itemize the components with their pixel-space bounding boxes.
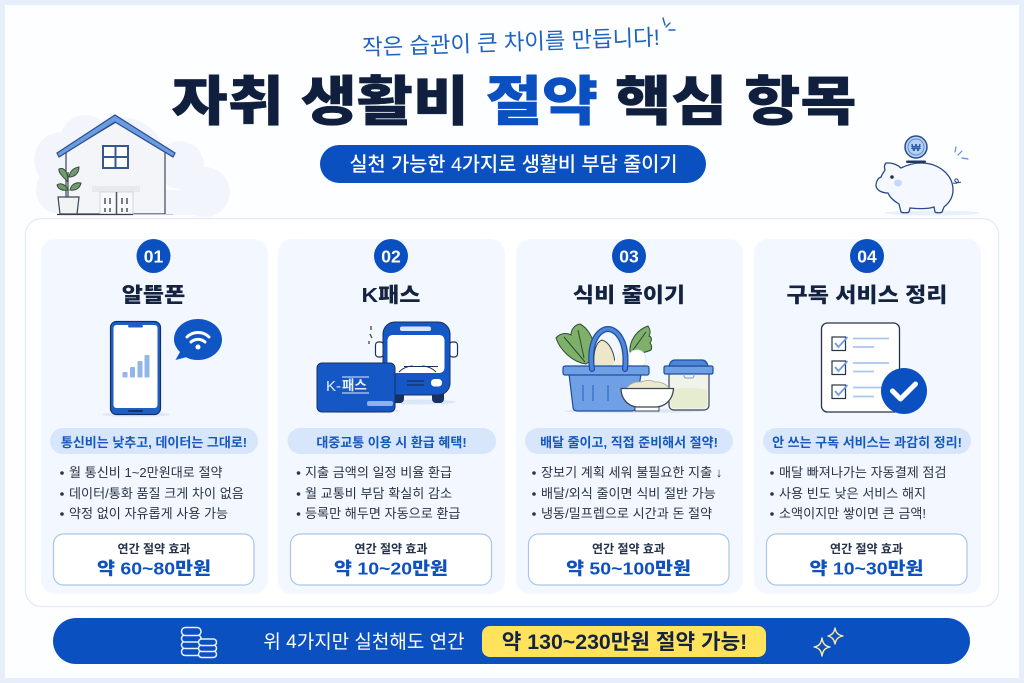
tagline [525,428,733,454]
bullet list: 냉동/밀프렙으로 시간과 돈 절약 [541,506,712,521]
bullet list: 등록만 해두면 자동으로 환급 [305,506,460,521]
icon: phone with wifi bubble [102,319,222,417]
badge 01: 01 [144,246,163,266]
annual savings box [54,534,254,585]
annual savings box: 약 60~80만원 [97,558,211,578]
badge 01 [136,239,170,273]
annual savings box: 약 10~20만원 [334,558,448,578]
annual savings box [766,534,967,585]
badge 02: 02 [381,246,401,266]
annual savings box: 연간 절약 효과 [118,541,190,556]
panel: main container [26,218,998,606]
heading: K패스: K패스 [362,283,420,307]
bullet list [60,465,244,521]
banner text: 위 4가지만 실천해도 연간 [263,631,465,653]
icon: piggy bank: ₩ [911,143,921,154]
bullet list [770,465,947,521]
icon: bus and K-pass card: K- [326,378,341,395]
tagline [50,428,258,454]
summary banner [53,618,970,664]
heading: 구독 서비스 정리: 구독 서비스 정리 [787,283,947,307]
bullet list [297,465,460,521]
tagline: 안 쓰는 구독 서비스는 과감히 정리! [772,435,962,450]
panel: card 02 [278,239,505,594]
icon: sparkles [814,628,843,656]
bullet list: 매달 빠져나가는 자동결제 점검 [779,465,947,480]
annual savings box: 연간 절약 효과 [355,541,427,556]
yellow highlight [482,626,766,657]
tagline: 배달 줄이고, 직접 준비해서 절약! [540,435,718,450]
bullet list: 장보기 계획 세워 불필요한 지출 ↓ [541,465,722,480]
tagline: 대중교통 이용 시 환급 혜택! [316,435,467,450]
bullet list: 데이터/통화 품질 크게 차이 없음 [69,486,244,501]
bullet list: 약정 없이 자유롭게 사용 가능 [69,506,228,521]
title: 자취 생활비 절약 핵심 항목 [172,72,856,132]
panel: card 04 [754,239,981,594]
bullet list: 월 통신비 1~2만원대로 절약 [69,465,223,480]
badge 04 [850,239,884,273]
annual savings box: 약 50~100만원 [566,558,691,578]
badge 03: 03 [619,246,639,266]
bullet list: 소액이지만 쌓이면 큰 금액! [779,506,926,521]
icon: house [34,115,230,217]
badge 04: 04 [857,246,877,266]
icon: bus and K-pass card [316,322,458,413]
badge 03 [612,239,646,273]
subtitle pill [320,145,706,183]
bullet list [532,465,722,521]
subtitle: 작은 습관이 큰 차이를 만듭니다! [362,25,660,60]
icon: checklist [822,323,927,414]
annual savings box: 연간 절약 효과 [830,541,903,556]
annual savings box [290,534,492,585]
heading: 식비 줄이기: 식비 줄이기 [573,283,685,307]
panel: card 01 [41,239,268,594]
bullet list: 지출 금액의 일정 비율 환급 [305,465,452,480]
icon: coins [182,628,216,658]
tagline: 통신비는 낮추고, 데이터는 그대로! [61,435,247,450]
panel: card 03 [516,239,743,594]
icon: bus and K-pass card: 패스 [342,378,367,393]
badge 02 [374,239,408,273]
bullet list: 사용 빈도 낮은 서비스 해지 [779,486,926,501]
subtitle pill: 실천 가능한 4가지로 생활비 부담 줄이기 [349,154,678,176]
tagline [288,428,496,454]
heading: 알뜰폰: 알뜰폰 [122,283,185,307]
bullet list: 배달/외식 줄이면 식비 절반 가능 [541,486,716,501]
icon: piggy bank [876,136,980,216]
icon: grocery basket, bowl, container [556,324,713,413]
yellow highlight: 약 130~230만원 절약 가능! [502,630,747,654]
bullet list: 월 교통비 부담 확실히 감소 [305,486,452,501]
tagline [763,428,971,454]
annual savings box: 약 10~30만원 [810,558,923,578]
annual savings box [528,534,729,585]
annual savings box: 연간 절약 효과 [592,541,665,556]
